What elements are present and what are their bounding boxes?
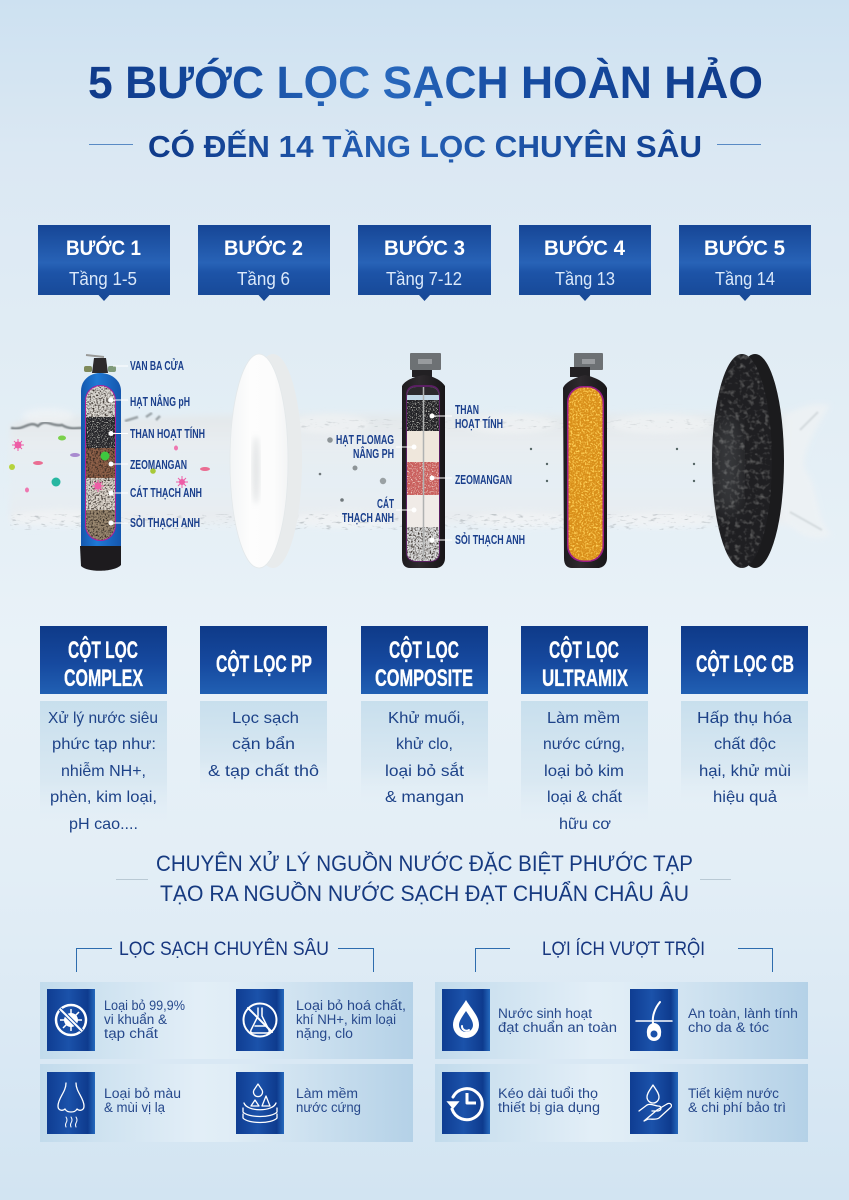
item: loại bỏ vi khuẩn xyxy=(47,989,185,1051)
tank: composite xyxy=(402,353,445,568)
item: loại bỏ vi khuẩn: tạp chất xyxy=(104,1026,158,1041)
step 5: BƯỚC 5 xyxy=(704,236,785,260)
step 2: BƯỚC 2 xyxy=(224,236,303,260)
step 4: Tầng 13 xyxy=(555,269,615,289)
column 4: loại bỏ kim xyxy=(544,763,624,780)
tank 3 labels: THAN xyxy=(455,402,479,417)
tank: ultramix xyxy=(563,353,607,568)
water stream xyxy=(10,404,832,538)
tank 3 labels: HẠT FLOMAG xyxy=(336,432,394,447)
filter disc: CB carbon xyxy=(712,354,784,568)
step 4 xyxy=(519,225,651,301)
column 1: phèn, kim loại, xyxy=(50,789,157,806)
item: tiết kiệm nước xyxy=(630,1072,786,1134)
column 5: hiệu quả xyxy=(713,789,777,806)
item: loại bỏ hoá chất: khí NH+, kim loại xyxy=(296,1012,396,1027)
item: nước sinh hoạt: Nước sinh hoạt xyxy=(498,1006,592,1021)
item: kéo dài tuổi thọ xyxy=(442,1072,600,1134)
tank 3 labels: SỎI THẠCH ANH xyxy=(455,532,525,547)
title: 5 BƯỚC LỌC SẠCH HOÀN HẢO xyxy=(88,57,763,108)
item: nước sinh hoạt xyxy=(442,989,617,1051)
column 1: phức tạp như: xyxy=(52,736,156,753)
item: an toàn da tóc: An toàn, lành tính xyxy=(688,1006,798,1021)
tank 1 labels: HẠT NÂNG pH xyxy=(130,394,190,409)
item: loại bỏ màu mùi: Loại bỏ màu xyxy=(104,1086,181,1101)
step 5: Tầng 14 xyxy=(715,269,775,289)
column 3: CỘT LỌC xyxy=(389,636,459,664)
filter columns xyxy=(40,626,808,835)
column 3: loại bỏ sắt xyxy=(385,761,465,780)
column 3 xyxy=(361,626,488,811)
column 4: hữu cơ xyxy=(559,816,612,833)
item: kéo dài tuổi thọ: thiết bị gia dụng xyxy=(498,1100,600,1115)
heading: lợi ích xyxy=(476,937,772,972)
step 3: BƯỚC 3 xyxy=(384,236,465,260)
tank 3 labels: THẠCH ANH xyxy=(342,510,394,525)
step headers xyxy=(38,225,811,301)
item: làm mềm nước: nước cứng xyxy=(296,1100,361,1115)
step 1 xyxy=(38,225,170,301)
tank 1 labels: SỎI THẠCH ANH xyxy=(130,515,200,530)
tagline xyxy=(116,851,731,906)
tank 1 labels: VAN BA CỬA xyxy=(130,358,184,373)
column 1: nhiễm NH+, xyxy=(61,761,146,780)
heading: lọc sạch: LỌC SẠCH CHUYÊN SÂU xyxy=(119,937,329,960)
panel: lợi ích vượt trội xyxy=(435,937,808,1142)
column 1: pH cao.... xyxy=(69,816,138,833)
column 3: COMPOSITE xyxy=(375,665,473,692)
item: tiết kiệm nước: Tiết kiệm nước xyxy=(688,1086,779,1101)
heading: lọc sạch xyxy=(76,937,374,972)
tagline: TẠO RA NGUỒN NƯỚC SẠCH ĐẠT CHUẨN CHÂU ÂU xyxy=(160,881,689,906)
column 1 xyxy=(40,626,167,835)
item: làm mềm nước: Làm mềm xyxy=(296,1086,358,1101)
step 1: BƯỚC 1 xyxy=(66,236,141,260)
tank 3 labels xyxy=(336,402,525,547)
column 1: COMPLEX xyxy=(64,665,143,692)
tank 3 labels: CÁT xyxy=(377,496,394,511)
item: loại bỏ vi khuẩn: vi khuẩn & xyxy=(104,1012,167,1027)
column 5 xyxy=(681,626,808,811)
tank 3 labels: NÂNG PH xyxy=(353,446,394,461)
subtitle: CÓ ĐẾN 14 TẦNG LỌC CHUYÊN SÂU xyxy=(148,128,702,164)
tank: complex xyxy=(80,355,121,571)
column 4: ULTRAMIX xyxy=(542,665,628,692)
step 2: Tầng 6 xyxy=(237,269,290,289)
step 3 xyxy=(358,225,491,301)
column 2: cặn bẩn xyxy=(232,735,295,753)
column 3: khử clo, xyxy=(396,736,453,753)
tank 1 labels: CÁT THẠCH ANH xyxy=(130,485,202,500)
column 4: loại & chất xyxy=(547,789,623,806)
step 1: Tầng 1-5 xyxy=(69,269,137,289)
item: tiết kiệm nước: & chi phí bảo trì xyxy=(688,1100,786,1115)
column 5: hại, khử mùi xyxy=(699,763,791,780)
item: làm mềm nước xyxy=(236,1072,361,1134)
step 3: Tầng 7-12 xyxy=(386,269,462,289)
tank 1 labels: THAN HOẠT TÍNH xyxy=(130,426,205,441)
filter disc: PP white xyxy=(230,354,302,568)
item: loại bỏ hoá chất: nặng, clo xyxy=(296,1026,353,1041)
step 2 xyxy=(198,225,330,301)
tank 1 labels: ZEOMANGAN xyxy=(130,457,187,472)
item: loại bỏ hoá chất xyxy=(236,989,406,1051)
column 1: CỘT LỌC xyxy=(68,636,138,664)
column 4: CỘT LỌC xyxy=(549,636,619,664)
tank 3 labels: ZEOMANGAN xyxy=(455,472,512,487)
item: nước sinh hoạt: đạt chuẩn an toàn xyxy=(498,1020,617,1035)
column 4: nước cứng, xyxy=(543,736,625,753)
column 4: Làm mềm xyxy=(547,710,620,727)
column 1: Xử lý nước siêu xyxy=(48,710,158,727)
step 5 xyxy=(679,225,811,301)
column 3: Khử muối, xyxy=(388,710,465,727)
column 5: Hấp thụ hóa xyxy=(697,710,792,727)
tank 1 labels xyxy=(108,358,205,530)
column 5: chất độc xyxy=(714,736,776,753)
panel: lọc sạch chuyên sâu xyxy=(40,937,413,1142)
item: loại bỏ vi khuẩn: Loại bỏ 99,9% xyxy=(104,998,185,1013)
column 2 xyxy=(200,626,327,801)
column 2: CỘT LỌC PP xyxy=(216,650,312,678)
column 3: & mangan xyxy=(385,789,464,806)
item: loại bỏ hoá chất: Loại bỏ hoá chất, xyxy=(296,998,406,1013)
heading: lợi ích: LỢI ÍCH VƯỢT TRỘI xyxy=(542,937,705,960)
column 5: CỘT LỌC CB xyxy=(696,650,794,678)
step 4: BƯỚC 4 xyxy=(544,236,625,260)
bacteria and particles xyxy=(9,436,695,502)
column 2: Lọc sạch xyxy=(232,710,299,727)
column 2: & tạp chất thô xyxy=(208,763,319,780)
item: kéo dài tuổi thọ: Kéo dài tuổi thọ xyxy=(498,1086,598,1101)
item: an toàn da tóc xyxy=(630,989,798,1051)
column 4 xyxy=(521,626,648,835)
item: loại bỏ màu mùi xyxy=(47,1072,181,1134)
tank 3 labels: HOẠT TÍNH xyxy=(455,416,503,431)
item: loại bỏ màu mùi: & mùi vị lạ xyxy=(104,1100,165,1115)
tagline: CHUYÊN XỬ LÝ NGUỒN NƯỚC ĐẶC BIỆT PHƯỚC TẠP xyxy=(156,851,693,876)
item: an toàn da tóc: cho da & tóc xyxy=(688,1020,769,1035)
